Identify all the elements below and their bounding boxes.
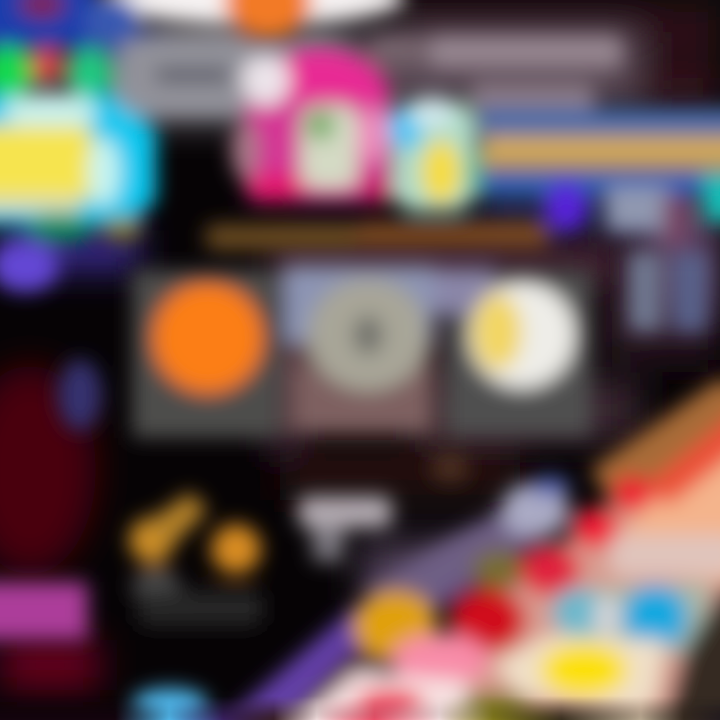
reel 2 with grey circle xyxy=(282,262,434,434)
peach table surface xyxy=(610,430,720,590)
top left sign: coloured lights xyxy=(0,0,140,100)
gold coins xyxy=(129,492,261,574)
gold marquee strip xyxy=(205,222,550,250)
stripes on right wall xyxy=(478,108,720,196)
red squares xyxy=(450,476,652,652)
grey blurred label under coins xyxy=(132,567,262,626)
white cells xyxy=(610,534,720,576)
top lamp: white and orange dome xyxy=(105,0,405,38)
right machine screens xyxy=(606,172,720,332)
betting table: bottom right diagonal xyxy=(225,378,720,720)
magenta seat panel xyxy=(0,582,88,640)
gold diamond xyxy=(353,591,437,659)
blue circles xyxy=(552,585,687,649)
red diagonal band xyxy=(640,385,720,505)
purple light xyxy=(544,180,588,232)
pink cell xyxy=(392,634,488,686)
bottom edge colour strip xyxy=(0,696,720,720)
brown spots between xyxy=(430,454,470,482)
orange upper rim xyxy=(590,378,720,515)
table base xyxy=(320,390,720,720)
pale block xyxy=(501,482,569,538)
olive floor xyxy=(459,692,531,720)
left sign: cyan and yellow panel xyxy=(0,92,156,242)
slot reels xyxy=(132,262,592,438)
reel 1 with orange circle xyxy=(132,270,280,438)
blue cell xyxy=(560,582,710,655)
dark corner xyxy=(665,580,720,720)
olive shadow spot xyxy=(472,550,528,590)
reel 3 with yellow and white circle xyxy=(434,268,592,436)
white bottom cell xyxy=(300,672,475,720)
left purple glow xyxy=(0,240,59,292)
blue and yellow emblem xyxy=(387,96,484,212)
blurred headline band xyxy=(120,36,623,112)
white blurred symbol xyxy=(298,496,392,562)
blue light bottom xyxy=(132,688,208,720)
left blue-purple glow by seat xyxy=(58,359,102,431)
purple edge strip xyxy=(225,500,550,720)
pink arch emblem xyxy=(231,48,396,204)
yellow oval cell xyxy=(495,635,665,712)
